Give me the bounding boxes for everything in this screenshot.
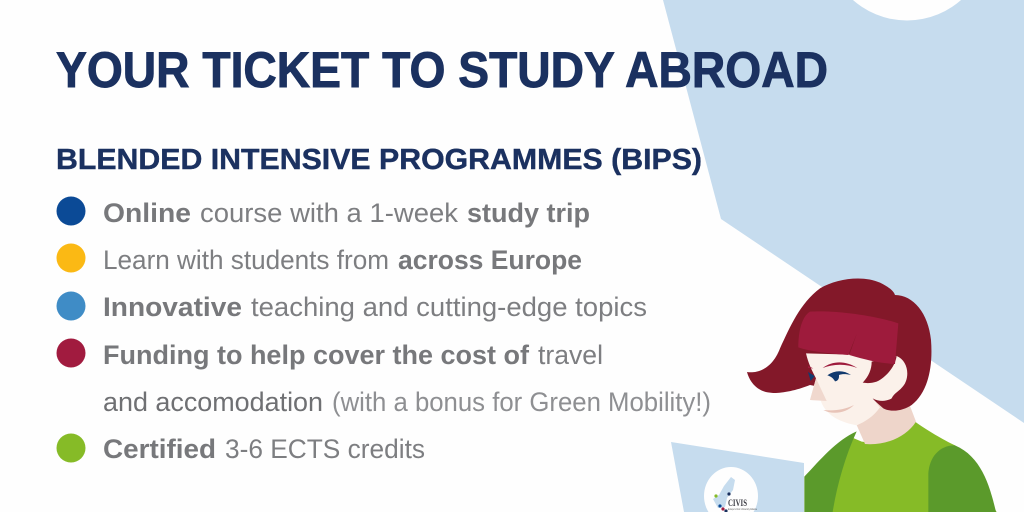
list item: funding: (with a bonus for Green Mobility!) [332, 387, 711, 417]
list item: certified credits [56, 434, 425, 464]
heading: BLENDED INTENSIVE PROGRAMMES (BIPS) [56, 144, 702, 176]
illustration: laptop with CIVIS logo [671, 442, 804, 512]
list item: funding: Funding to help cover the cost of [103, 340, 530, 370]
list item: funding: travel [538, 340, 603, 370]
list item: online course: Online [103, 198, 191, 228]
background: light blue shape [663, 0, 1024, 423]
list item: certified credits: Certified [103, 434, 216, 464]
list item: innovative teaching: teaching and cutting-edge topics [251, 292, 647, 322]
title: YOUR TICKET TO STUDY ABROAD [56, 42, 828, 98]
list item: innovative teaching [56, 292, 647, 322]
list item: across Europe [56, 244, 582, 275]
list item: innovative teaching: Innovative [103, 292, 242, 322]
illustration: laptop with CIVIS logo: Europe's Civic University Alliance [728, 507, 757, 511]
list item: online course: study trip [467, 198, 590, 228]
list item: online course [56, 196, 590, 228]
illustration: student [747, 278, 997, 512]
list item: across Europe: across Europe [398, 245, 582, 275]
list item: online course: course with a 1-week [200, 198, 458, 228]
illustration: laptop with CIVIS logo: CIVIS [728, 498, 747, 508]
list item: funding [56, 338, 711, 417]
list item: certified credits: 3-6 ECTS credits [225, 434, 425, 464]
list item: funding: and accomodation [103, 387, 323, 417]
list item: across Europe: Learn with students from [103, 245, 389, 275]
background: white circle [826, 0, 988, 20]
